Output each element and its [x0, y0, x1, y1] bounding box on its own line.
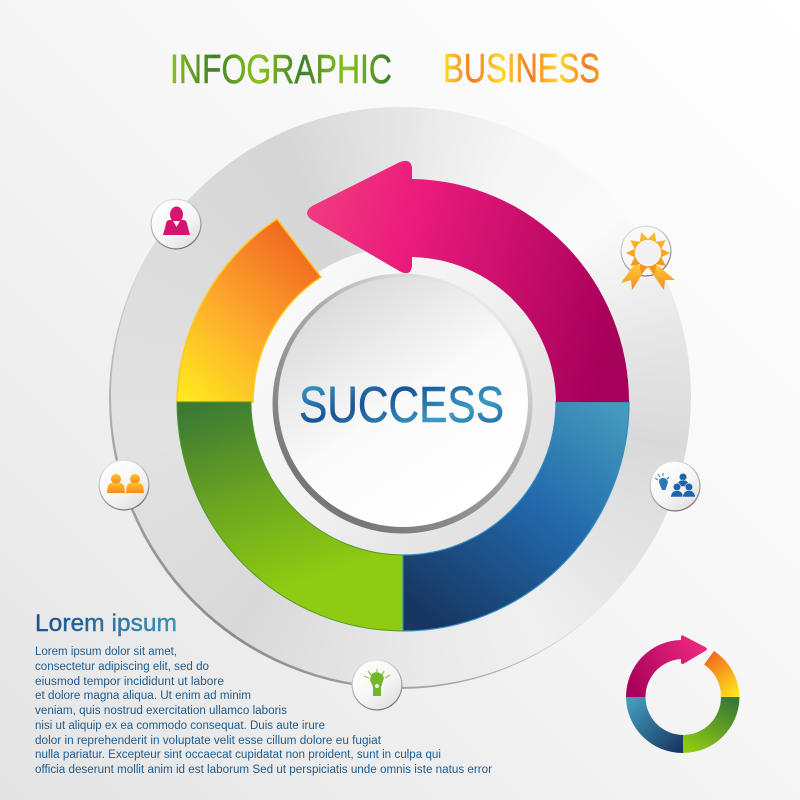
body text: veniam, quis nostrud exercitation ullamco laboris: [35, 705, 287, 717]
mini segment: blue: [626, 697, 683, 753]
body text: officia deserunt mollit anim id est laborum Sed ut perspiciatis unde omnis iste natus error: [35, 764, 492, 776]
center button: [272, 274, 532, 534]
badge: idea: [352, 660, 402, 710]
body text: dolor in reprehenderit in voluptate velit esse cillum dolore eu fugiat: [35, 735, 382, 747]
silver disc: [109, 107, 691, 689]
icon: sunburst: [626, 232, 670, 274]
body text: et dolore magna aliqua. Ut enim ad minim: [35, 690, 251, 702]
badge: person: [150, 198, 202, 250]
icon: medal center: [636, 240, 660, 266]
body text: eiusmod tempor incididunt ut labore: [35, 676, 224, 688]
body text: Lorem ipsum dolor sit amet,: [35, 646, 177, 658]
icon: people: [107, 474, 144, 493]
arrow: magenta: [307, 161, 629, 402]
icon: green lightbulb: [364, 669, 390, 696]
segment: green: [177, 402, 403, 631]
title: INFOGRAPHIC: INFOGRAPHIC: [170, 46, 392, 92]
icon: person: [163, 206, 190, 235]
badge: medal: [620, 226, 675, 290]
badge: two people: [98, 460, 150, 510]
icon: team: [670, 473, 696, 497]
heading: Lorem ipsum: Lorem ipsum: [35, 610, 177, 637]
icon: ribbons: [621, 262, 675, 290]
mini segment: green: [683, 697, 740, 753]
badge: team and idea: [650, 460, 700, 512]
mini arrow: magenta: [626, 635, 707, 697]
cycle ring: [177, 161, 629, 631]
label: SUCCESS: SUCCESS: [299, 376, 504, 433]
mini cycle ring: [626, 635, 740, 753]
inner halo: [248, 247, 558, 557]
body text: [35, 646, 492, 776]
segment: blue: [403, 402, 629, 631]
title: BUSINESS: BUSINESS: [443, 45, 600, 91]
body text: consectetur adipiscing elit, sed do: [35, 661, 209, 673]
segment: yellow orange: [177, 219, 321, 402]
body text: nisi ut aliquip ex ea commodo consequat. Duis aute irure: [35, 720, 325, 732]
mini segment: orange: [704, 651, 740, 697]
icon: lightbulb: [655, 473, 669, 490]
body text: nulla pariatur. Excepteur sint occaecat cupidatat non proident, sunt in culpa qui: [35, 749, 441, 761]
